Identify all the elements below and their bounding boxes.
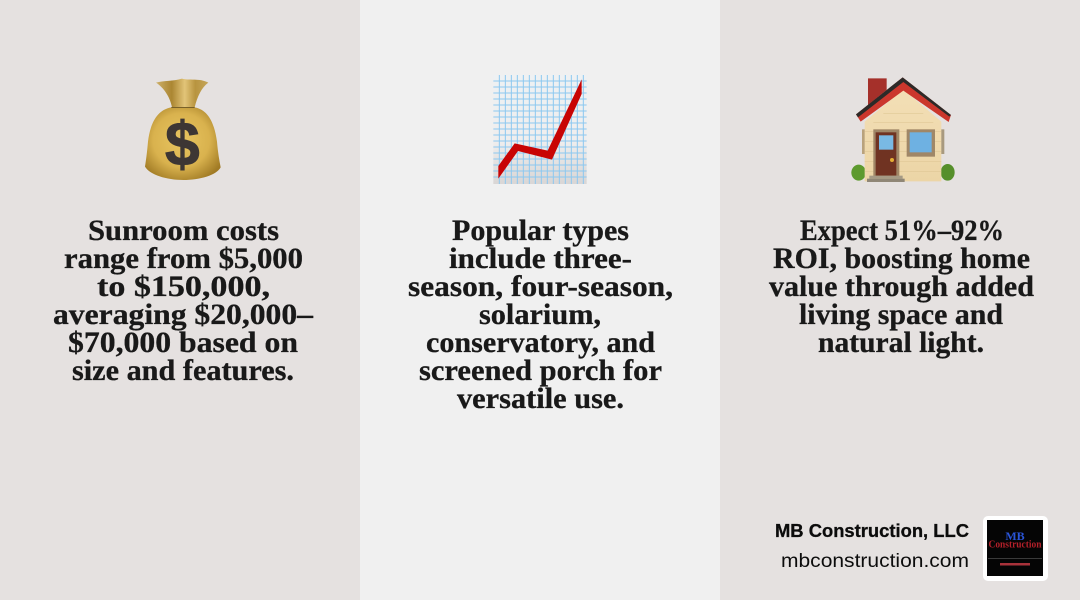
heading: ROI text: living space and xyxy=(799,299,1004,331)
logo: MB Construction badge: MB xyxy=(1005,529,1025,543)
heading: types text: season, four-season, xyxy=(408,271,673,303)
icon: money bag: $ xyxy=(165,110,200,179)
heading: types text: include three- xyxy=(449,243,632,275)
heading: costs text: to $150,000, xyxy=(97,271,270,303)
icon: money bag xyxy=(145,79,221,180)
footer: company name and website xyxy=(775,521,969,572)
heading: costs text: range from $5,000 xyxy=(64,243,303,275)
heading: ROI text: ROI, boosting home xyxy=(773,243,1030,275)
heading: types text xyxy=(408,215,673,415)
footer: company name and website: MB Construction, LLC xyxy=(775,521,969,541)
heading: ROI text: value through added xyxy=(769,271,1035,303)
footer: company name and website: mbconstruction.com xyxy=(781,551,969,572)
panel: types xyxy=(360,0,720,600)
icon: house xyxy=(851,77,955,182)
panel: return on investment xyxy=(720,0,1080,600)
heading: ROI text: Expect 51%–92% xyxy=(800,215,1004,247)
logo: MB Construction badge: Construction xyxy=(988,540,1042,550)
heading: costs text xyxy=(53,215,313,387)
heading: ROI text: natural light. xyxy=(818,327,984,359)
heading: costs text: size and features. xyxy=(72,355,294,387)
heading: types text: screened porch for xyxy=(419,355,662,387)
heading: costs text: Sunroom costs xyxy=(88,215,279,247)
logo: MB Construction badge xyxy=(983,516,1048,581)
heading: types text: versatile use. xyxy=(457,383,624,415)
panel: costs xyxy=(0,0,360,600)
heading: types text: Popular types xyxy=(452,215,629,247)
heading: ROI text xyxy=(769,215,1035,359)
heading: costs text: $70,000 based on xyxy=(68,327,298,359)
heading: costs text: averaging $20,000– xyxy=(53,299,313,331)
heading: types text: conservatory, and xyxy=(426,327,656,359)
icon: chart with upward trend xyxy=(493,75,587,184)
heading: types text: solarium, xyxy=(479,299,601,331)
